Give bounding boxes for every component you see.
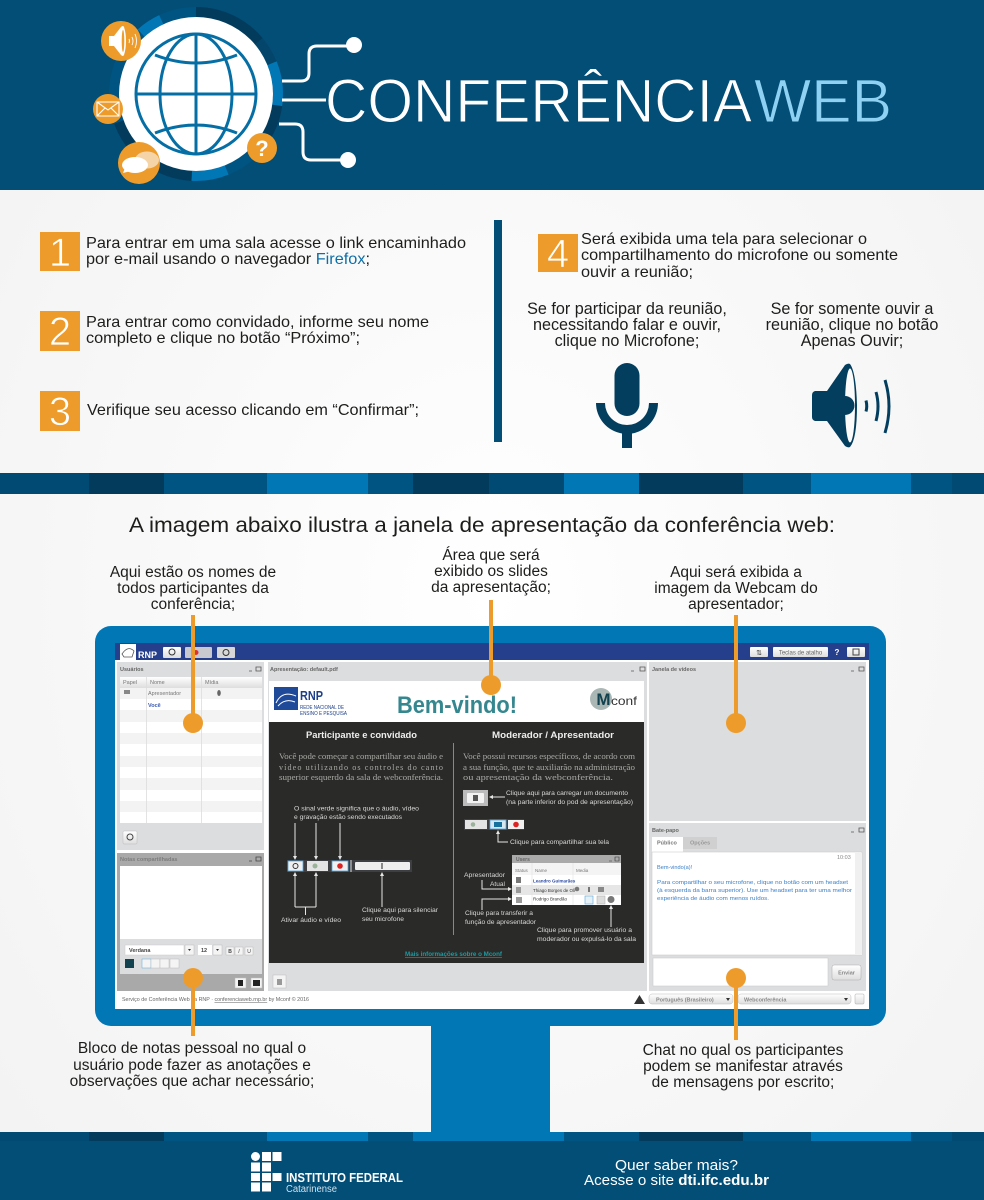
slide header: conf xyxy=(611,694,638,708)
callout: webcam: imagem da Webcam do xyxy=(654,580,818,597)
connector: notes xyxy=(183,968,203,1036)
callout: webcam: Aqui será exibida a xyxy=(670,564,802,581)
status bar: Webconferência xyxy=(744,998,787,1004)
connector: slides xyxy=(481,600,501,695)
icon: question badge: ? xyxy=(255,136,269,161)
callout: chat: Chat no qual os participantes xyxy=(643,1042,844,1059)
panel: video window xyxy=(649,662,866,821)
chalkboard: Clique para compartilhar sua tela xyxy=(510,839,609,846)
footer call to action: Quer saber mais? xyxy=(615,1157,738,1174)
microphone instructions xyxy=(527,300,727,350)
panel: shared notes: I xyxy=(238,949,240,955)
panel: chat: Público xyxy=(657,840,678,846)
step 4: Será exibida uma tela para selecionar o xyxy=(581,231,867,248)
panel: shared notes: B xyxy=(228,949,232,955)
panel: presentation: Apresentação: default.pdf xyxy=(270,667,338,673)
microphone instructions: Se for participar da reunião, xyxy=(527,300,727,318)
panel: chat: 10:03 xyxy=(837,855,851,861)
slide header: ENSINO E PESQUISA xyxy=(300,711,348,717)
logo: Instituto Federal: INSTITUTO FEDERAL xyxy=(286,1171,403,1185)
app toolbar: Teclas de atalho xyxy=(779,650,823,656)
chalkboard: Users xyxy=(516,857,530,863)
footer xyxy=(0,1141,984,1200)
chalkboard: função de apresentador xyxy=(465,919,537,926)
callout: notes xyxy=(70,1040,314,1090)
icon: speaker badge xyxy=(101,21,141,61)
header banner xyxy=(0,0,984,190)
panel: shared notes: U xyxy=(247,949,251,955)
chalkboard: Clique aqui para carregar um documento xyxy=(506,790,628,797)
step 2 xyxy=(40,310,429,354)
monitor frame xyxy=(95,626,886,1026)
chalkboard: Status xyxy=(515,868,529,873)
chalkboard: Moderador / Apresentador xyxy=(492,730,614,741)
panel: users: Usuários xyxy=(120,667,144,673)
callout: notes: observações que achar necessário; xyxy=(70,1073,314,1090)
callout: slides: da apresentação; xyxy=(431,579,551,596)
panel: chat: Bem-vindo(a)! xyxy=(657,865,693,871)
panel: chat: (à esquerda da barra superior). Use um headset para ter uma melhor xyxy=(657,888,852,894)
chalkboard: Thiago Borges de Oli xyxy=(533,888,575,893)
chalkboard: Participante e convidado xyxy=(306,730,417,741)
title: WEB xyxy=(754,67,892,135)
callout: slides: exibido os slides xyxy=(434,563,548,580)
slide header: RNP xyxy=(300,688,323,703)
logo: Instituto Federal xyxy=(251,1152,403,1195)
step 4: compartilhamento do microfone ou somente xyxy=(581,247,898,264)
footer call to action: Acesse o site dti.ifc.edu.br xyxy=(584,1172,769,1189)
step 3 xyxy=(40,390,419,434)
app toolbar: RNP xyxy=(138,650,157,660)
step 4: 4 xyxy=(547,232,569,276)
panel: users: Você xyxy=(148,703,161,709)
app toolbar: ? xyxy=(835,648,840,657)
slide header: REDE NACIONAL DE xyxy=(300,705,345,711)
panel: users: Papel xyxy=(123,680,137,686)
panel: shared notes: 12 xyxy=(201,948,207,954)
callout: participants: Aqui estão os nomes de xyxy=(110,564,276,581)
section heading: A imagem abaixo ilustra a janela de apresentação da conferência web: xyxy=(129,512,835,537)
icon: microphone xyxy=(596,363,658,448)
chalkboard: Leandro Guimarães xyxy=(533,878,576,884)
chalkboard: Você pode começar a compartilhar seu áudio e xyxy=(279,752,443,761)
icon: envelope badge xyxy=(93,94,123,124)
chalkboard: superior esquerdo da sala de webconferência. xyxy=(279,773,443,782)
step 2: 2 xyxy=(49,310,71,354)
slide header: M xyxy=(596,690,611,709)
top colour strip xyxy=(0,473,984,494)
panel: chat: Bate-papo xyxy=(652,828,680,834)
panel: presentation xyxy=(268,662,647,991)
chalkboard: Você possui recursos específicos, de acordo com xyxy=(463,752,636,761)
microphone instructions: clique no Microfone; xyxy=(555,332,699,350)
panel: users: Apresentador xyxy=(148,691,181,697)
chalkboard: Atual xyxy=(490,881,505,888)
step 1: 1 xyxy=(49,231,71,275)
chalkboard: Name xyxy=(535,868,548,873)
chalkboard: Rodrigo Brandão xyxy=(533,896,568,902)
slide header: Bem-vindo! xyxy=(397,692,517,719)
panel: shared notes: Verdana xyxy=(129,948,151,954)
vertical divider xyxy=(494,220,502,442)
panel: users: Nome xyxy=(150,680,165,686)
listen instructions: Se for somente ouvir a xyxy=(771,300,933,318)
chalkboard xyxy=(269,722,644,963)
chalkboard: seu microfone xyxy=(362,916,404,923)
connector: chat xyxy=(726,968,746,1040)
callout: webcam: apresentador; xyxy=(688,596,784,613)
panel: chat: experiência de áudio com menos ruídos. xyxy=(657,896,769,902)
chalkboard: Clique para transferir a xyxy=(465,910,533,917)
monitor stand xyxy=(431,1020,550,1132)
panel: chat xyxy=(649,823,866,991)
panel: chat: Enviar xyxy=(838,970,856,976)
step 1: Para entrar em uma sala acesse o link encaminhado xyxy=(86,235,466,252)
icon: question badge xyxy=(247,133,277,163)
panel: users: Mídia xyxy=(205,680,219,686)
step 4 xyxy=(538,231,898,281)
callout: chat: podem se manifestar através xyxy=(643,1058,843,1075)
panel: shared notes: Notas compartilhadas xyxy=(120,857,177,863)
app toolbar: ⇅ xyxy=(756,650,762,657)
listen instructions xyxy=(766,300,938,350)
conference app screenshot xyxy=(115,643,869,1009)
chalkboard: Ativar áudio e vídeo xyxy=(281,917,341,924)
connector: webcam xyxy=(726,615,746,733)
chalkboard: Clique aqui para silenciar xyxy=(362,907,439,914)
connector: participants xyxy=(183,615,203,733)
step 3: 3 xyxy=(49,390,71,434)
connector lines xyxy=(279,37,362,168)
app toolbar xyxy=(115,643,869,660)
step 2: Para entrar como convidado, informe seu nome xyxy=(86,314,429,331)
listen instructions: reunião, clique no botão xyxy=(766,316,938,334)
callout: notes: usuário pode fazer as anotações e xyxy=(73,1057,311,1074)
status bar: Serviço de Conferência Web da RNP · conferenciaweb.rnp.br by Mconf © 2016 xyxy=(122,996,309,1003)
panel: shared notes xyxy=(117,853,264,991)
status bar: Português (Brasileiro) xyxy=(656,998,714,1004)
callout: chat xyxy=(643,1042,844,1091)
bottom colour strip xyxy=(0,1132,984,1141)
chalkboard: moderador ou expulsá-lo da sala xyxy=(537,936,636,943)
chalkboard: Mais informações sobre o Mconf xyxy=(405,951,503,958)
chalkboard: vídeo utilizando os controles do canto xyxy=(279,763,443,772)
callout: chat: de mensagens por escrito; xyxy=(652,1074,834,1091)
status bar xyxy=(122,994,864,1004)
icon: chat badge xyxy=(118,142,160,184)
step 1: por e-mail usando o navegador Firefox; xyxy=(86,251,370,268)
icon: speaker xyxy=(812,364,889,447)
step 1 xyxy=(40,231,466,275)
logo: globe with ring xyxy=(114,12,278,176)
callout: participants: todos participantes da xyxy=(117,580,269,597)
logo: Instituto Federal: Catarinense xyxy=(286,1184,337,1195)
step 2: completo e clique no botão “Próximo”; xyxy=(86,330,360,347)
panel: chat: Para compartilhar o seu microfone, clique no botão com um headset xyxy=(657,880,848,886)
chalkboard: Clique para promover usuário a xyxy=(537,927,632,934)
title: CONFERÊNCIA xyxy=(325,67,752,135)
panel: chat: Opções xyxy=(690,840,710,846)
listen instructions: Apenas Ouvir; xyxy=(801,332,903,350)
chalkboard: a sua função, que te auxiliarão na administração xyxy=(463,763,635,772)
step 3: Verifique seu acesso clicando em “Confirmar”; xyxy=(87,402,419,419)
callout: participants: conferência; xyxy=(151,596,235,613)
chalkboard: e gravação estão sendo executados xyxy=(294,814,402,821)
chalkboard: Apresentador xyxy=(464,872,506,879)
step 4: ouvir a reunião; xyxy=(581,264,693,281)
chalkboard: O sinal verde significa que o áudio, vídeo xyxy=(294,806,419,812)
callout: participants xyxy=(110,564,276,613)
microphone instructions: necessitando falar e ouvir, xyxy=(533,316,721,334)
chalkboard: Media xyxy=(576,868,589,873)
callout: webcam xyxy=(654,564,818,613)
panel: video window: Janela de vídeos xyxy=(652,667,696,673)
slide header xyxy=(269,681,644,722)
panel: users xyxy=(117,662,264,850)
footer call to action xyxy=(584,1157,769,1189)
callout: slides xyxy=(431,547,551,596)
callout: notes: Bloco de notas pessoal no qual o xyxy=(78,1040,306,1057)
callout: slides: Área que será xyxy=(442,547,540,564)
chalkboard: (na parte inferior do pod de apresentação) xyxy=(506,799,633,806)
chalkboard: ou apresentação da webconferência. xyxy=(463,773,613,782)
